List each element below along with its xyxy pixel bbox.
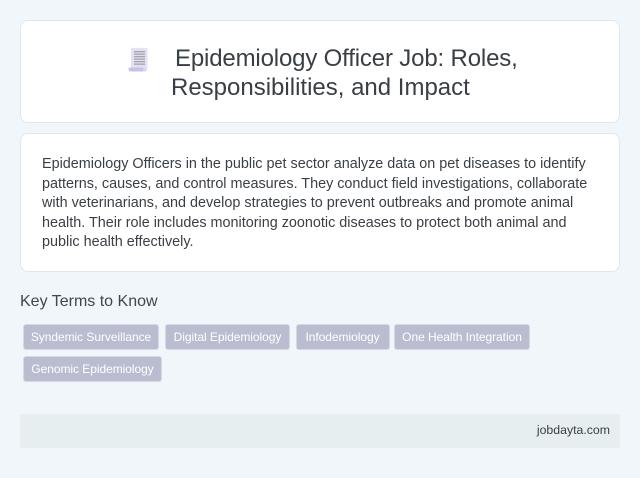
tag bbox=[394, 324, 530, 350]
tag: Genomic Epidemiology bbox=[31, 362, 154, 376]
tag bbox=[296, 324, 390, 350]
tag bbox=[165, 324, 290, 350]
description text: with veterinarians, and develop strategies to prevent outbreaks and promote animal bbox=[42, 195, 573, 211]
panel: title card bbox=[20, 20, 620, 123]
panel: description bbox=[20, 133, 620, 272]
description text: Epidemiology Officers in the public pet sector analyze data on pet diseases to identify bbox=[42, 156, 586, 172]
tag: Digital Epidemiology bbox=[174, 330, 281, 344]
tag: Infodemiology bbox=[305, 330, 380, 344]
tags bbox=[23, 324, 530, 382]
title: Responsibilities, and Impact bbox=[171, 74, 470, 101]
tag: Syndemic Surveillance bbox=[31, 330, 151, 344]
footer source: jobdayta.com bbox=[537, 423, 610, 437]
title bbox=[171, 45, 518, 101]
heading: key terms: Key Terms to Know bbox=[20, 293, 158, 310]
icon: document bbox=[128, 48, 148, 72]
tag: One Health Integration bbox=[402, 330, 522, 344]
footer bbox=[20, 414, 620, 448]
description text: health. Their role includes monitoring zoonotic diseases to protect both animal and bbox=[42, 214, 566, 230]
description text bbox=[42, 156, 587, 250]
tag bbox=[23, 324, 159, 350]
tag bbox=[23, 356, 162, 382]
title: Epidemiology Officer Job: Roles, bbox=[175, 45, 518, 72]
description text: patterns, causes, and control measures. They conduct field investigations, collaborate bbox=[42, 176, 587, 192]
description text: public health effectively. bbox=[42, 234, 193, 250]
